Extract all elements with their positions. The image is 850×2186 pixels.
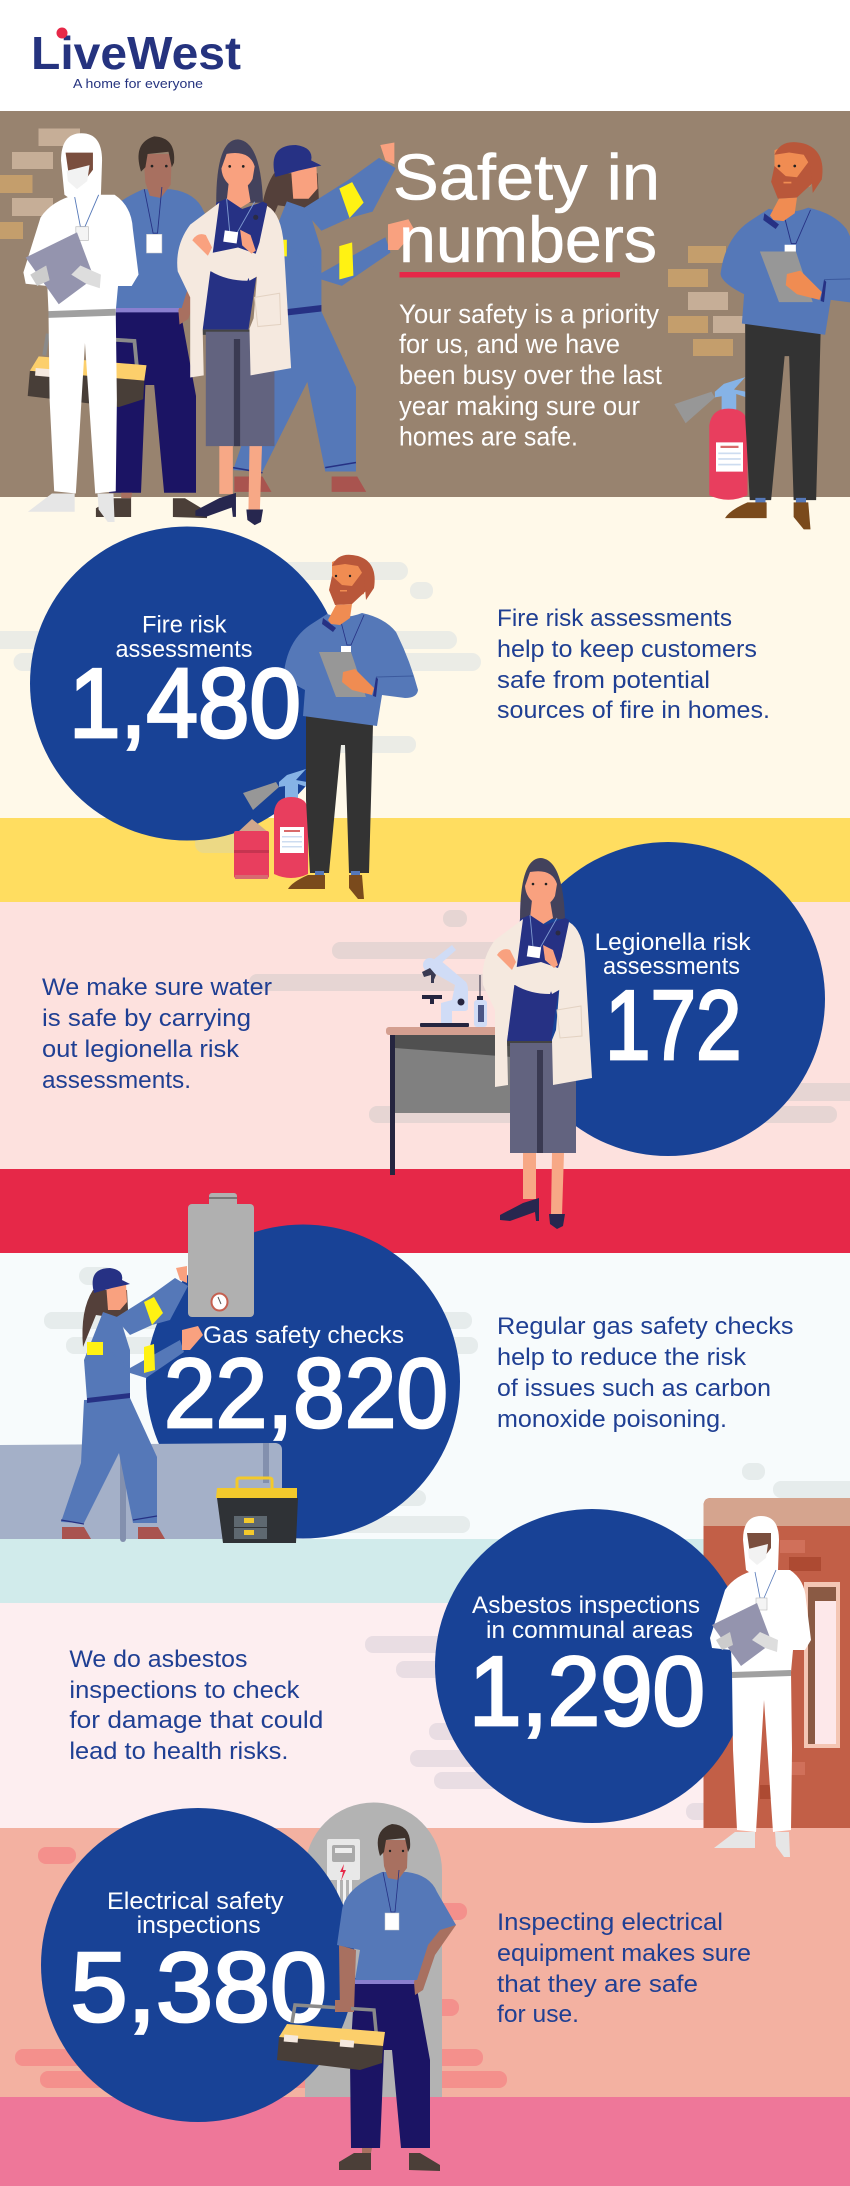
description: help to keep customers	[497, 636, 757, 663]
description: lead to health risks.	[69, 1738, 288, 1765]
stat number: 22,820	[164, 1338, 448, 1448]
panel: electrical safety inspections	[15, 1802, 751, 2171]
description	[69, 1646, 323, 1765]
description: for use.	[497, 2001, 579, 2028]
description: of issues such as carbon	[497, 1375, 771, 1402]
stat label: Asbestos inspections	[472, 1592, 700, 1619]
description: Inspecting electrical	[497, 1909, 723, 1936]
figure: gas engineer	[61, 1266, 203, 1539]
stat label: assessments	[603, 953, 740, 980]
stat circle: 22,820	[146, 1224, 460, 1538]
hero intro text	[399, 299, 663, 452]
stat number: 5,380	[70, 1932, 327, 2042]
stat label: Legionella risk	[595, 929, 751, 956]
logo: A home for everyone	[73, 76, 203, 91]
description: sources of fire in homes.	[497, 697, 770, 724]
heading: safety in numbers: Safety in	[393, 140, 660, 214]
description: for damage that could	[69, 1707, 323, 1734]
panel: gas safety checks	[0, 1193, 850, 1543]
icon: electrical meter alcove	[305, 1802, 442, 2097]
description	[497, 1313, 794, 1433]
figure: fire assessor	[720, 142, 850, 529]
description: that they are safe	[497, 1971, 698, 1998]
heading: safety in numbers	[393, 140, 660, 278]
heading: safety in numbers: numbers	[399, 203, 657, 276]
figure: scientist	[177, 139, 291, 525]
stat circle: 1,290	[435, 1509, 749, 1823]
stat circle: 172	[511, 842, 825, 1156]
stat number: 172	[605, 970, 742, 1080]
panel: hero	[0, 128, 850, 529]
stat label	[595, 929, 751, 980]
figure: fire assessor	[284, 555, 418, 899]
icon: toolbox	[216, 1478, 298, 1543]
icon: lab desk with microscope	[386, 945, 512, 1175]
icon: fire extinguisher	[674, 377, 748, 500]
figure: asbestos inspector	[23, 133, 139, 522]
description: inspections to check	[69, 1677, 300, 1704]
panel: asbestos inspections	[69, 1498, 850, 1857]
description: We do asbestos	[69, 1646, 247, 1673]
logo: LiveWest	[31, 27, 241, 79]
description	[497, 605, 770, 724]
stat label: Fire risk	[142, 612, 227, 639]
description: safe from potential	[497, 667, 710, 694]
icon: boiler	[188, 1193, 254, 1317]
stat label: Electrical safety	[107, 1888, 284, 1915]
description: We make sure water	[42, 974, 272, 1001]
hero intro text: year making sure our	[399, 391, 640, 421]
stat label	[116, 612, 252, 663]
stat label: Gas safety checks	[203, 1322, 404, 1349]
hero intro text: Your safety is a priority	[399, 299, 660, 329]
stat label: assessments	[116, 636, 252, 663]
hero wall bricks	[0, 128, 745, 356]
description: assessments.	[42, 1067, 191, 1094]
stat label	[472, 1592, 700, 1644]
wall unit backdrop	[0, 1443, 282, 1542]
stat label	[107, 1888, 284, 1939]
stat number: 1,480	[69, 648, 301, 758]
figure: electrician	[277, 1824, 456, 2171]
description: is safe by carrying	[42, 1005, 251, 1032]
figure: gas engineer	[233, 142, 415, 492]
icon: sand bucket	[234, 819, 269, 879]
description: help to reduce the risk	[497, 1344, 747, 1371]
description: Regular gas safety checks	[497, 1313, 794, 1340]
panel: legionella risk assessments	[42, 842, 850, 1229]
hero intro text: been busy over the last	[399, 360, 663, 390]
hero intro text: for us, and we have	[399, 329, 620, 359]
figure: electrician	[28, 136, 225, 518]
stat number: 1,290	[469, 1636, 705, 1746]
panel: fire risk assessments	[0, 526, 770, 899]
icon: fire extinguisher	[243, 769, 308, 878]
description: out legionella risk	[42, 1036, 240, 1063]
description: monoxide poisoning.	[497, 1406, 727, 1433]
stat label: inspections	[137, 1912, 261, 1939]
stat circle: 5,380	[41, 1808, 355, 2122]
icon: brick building with door	[704, 1498, 850, 1828]
hero intro text: homes are safe.	[399, 422, 578, 452]
description: equipment makes sure	[497, 1940, 751, 1967]
stat label: in communal areas	[486, 1617, 693, 1644]
description	[497, 1909, 751, 2028]
description	[42, 974, 272, 1094]
description: Fire risk assessments	[497, 605, 732, 632]
figure: asbestos inspector	[710, 1516, 811, 1857]
figure: scientist	[482, 858, 592, 1229]
stat circle: 1,480	[30, 526, 344, 840]
